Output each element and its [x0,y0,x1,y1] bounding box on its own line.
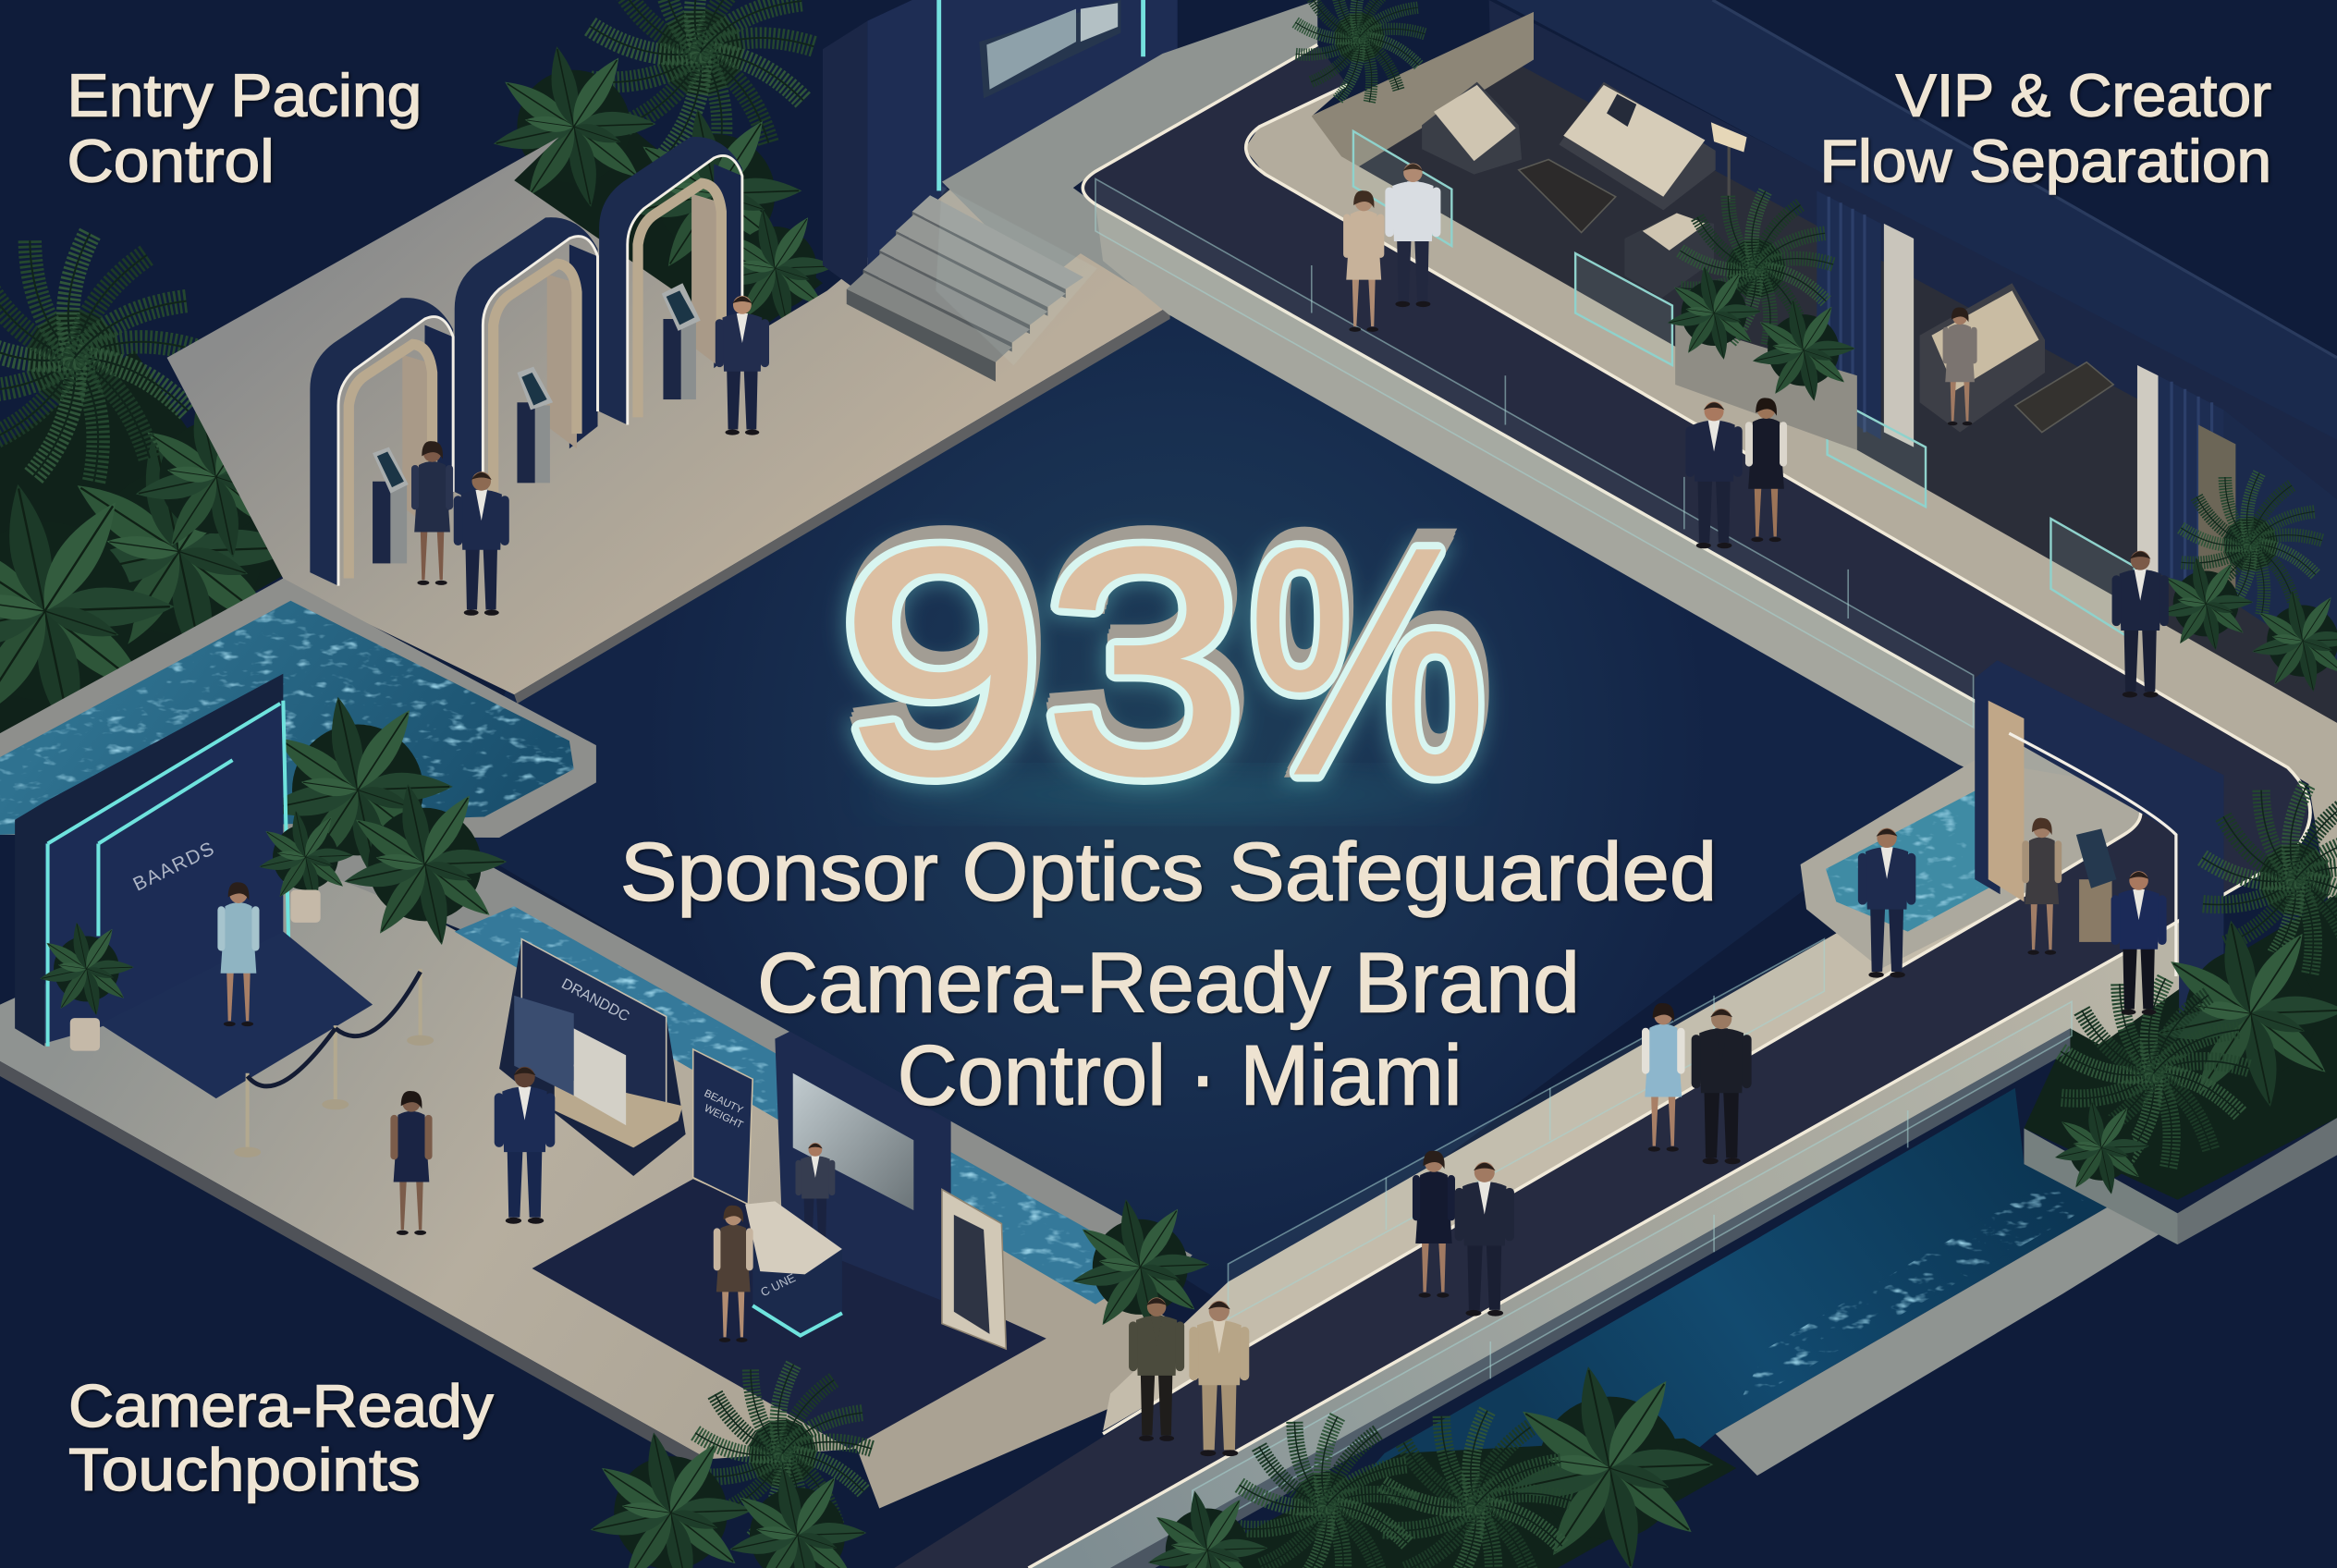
kiosk 3 [662,283,701,399]
plants behind brand wall [262,694,507,947]
screen [979,0,1120,98]
reception counter [745,1201,842,1336]
arch 2 [455,217,598,506]
entry plaza floor [167,137,1170,694]
label: VIP and creator flow [1820,63,2271,195]
walkway light lines [1028,44,2310,1568]
label: entry pacing: Entry Pacing [67,63,422,129]
plants: bottom centre [588,1363,872,1568]
bridge upper concrete [1103,864,2025,1431]
booth [532,1032,1046,1449]
figure face: % [1249,483,1486,840]
headline figure 93% [839,470,1490,840]
plants: lower right [2054,783,2337,1195]
water channel [1312,1088,2125,1536]
kiosk 2 [517,367,553,483]
plants: left garden [0,232,300,741]
headline line 1: Sponsor Optics Safeguarded [620,827,1717,918]
figure outline: % [1249,483,1486,840]
left garden bed [0,350,287,738]
glow: 9 [839,483,1043,840]
extrusion: 9 [843,473,1046,831]
second lounge sofa [1920,283,2045,433]
lower concourse floor [0,857,1178,1509]
floor lamp [1711,122,1747,202]
plant at booth corner [1071,1197,1209,1337]
figure face: 9 [839,483,1043,840]
curtains [1817,190,1914,447]
concrete lounge wall [1310,12,1534,182]
bridge underside [1110,1028,2070,1568]
kiosk 1 [373,447,409,563]
second curtains [2137,365,2223,596]
booth screen [793,1073,913,1210]
stanchions [234,969,434,1158]
zone: lounge [1310,12,2337,670]
label: camera-ready touchpoints: Touchpoints [68,1437,421,1503]
water strip [321,805,1193,1305]
guest at counter [714,1206,753,1342]
merch stand: DRANDDC [558,975,632,1025]
stair wall with screen [823,0,1178,298]
headline line 3: Control · Miami [898,1029,1462,1123]
planter with plants [1666,190,1857,450]
brand platform [100,932,373,1098]
portrait banner [942,1190,1006,1349]
label: entry pacing [67,63,422,195]
arch 3 [599,137,742,424]
extrusion: 9 [841,478,1044,836]
right planter [2024,894,2337,1244]
floor guests [390,1067,555,1235]
coffee table [1519,160,1616,232]
walkway concrete upper strip [1244,85,2337,954]
headline line 2: Camera-Ready Brand [757,937,1580,1031]
banner [693,1049,752,1205]
zone: upper right wall bands [1312,0,2337,730]
plants: top plant bed [491,0,836,340]
banner: WEIGHT [703,1103,745,1132]
central navy panel [447,305,1989,1312]
label: VIP and creator flow: Flow Separation [1820,129,2271,195]
label: entry pacing: Control [67,129,275,195]
plaza edge [514,305,1170,704]
glow: 3 [1044,483,1244,840]
walkway guests [1129,163,2169,1456]
floor edge [0,1061,708,1474]
booth carpet [532,1179,1046,1449]
glow [839,483,1486,840]
arch 1 [310,298,453,586]
plants: bottom band [1146,1364,1736,1568]
lounge glass panels [1353,131,2135,641]
merch stand [499,939,686,1176]
extrusion: 9 [844,470,1047,827]
potted plant left [39,921,134,1051]
second armchair [1624,214,1714,298]
booth wall [775,1032,951,1305]
channel coping [1716,1197,2176,1476]
small pool [1801,760,2154,969]
bridge lower concrete [1028,921,2181,1568]
end wall [2223,410,2337,670]
extrusion: % [1252,473,1489,831]
figure face [839,483,1486,840]
potted plant right [258,809,353,923]
glow: % [1249,483,1486,840]
plant at lounge entry [1294,0,1425,103]
left pool [0,579,596,838]
plants: right of lounge [2158,472,2337,693]
staff behind counter [795,1143,835,1245]
extrusion: 3 [1046,473,1247,831]
extrusion: % [1254,470,1490,827]
glass rails [1095,178,2072,1536]
banner: BEAUTY [703,1088,745,1117]
arch kiosk [2076,828,2116,942]
brand wall [15,674,297,1047]
floor glow under figure [864,784,1475,805]
label: camera-ready touchpoints [68,1373,494,1503]
side table [2015,362,2113,433]
extrusion: 3 [1045,478,1246,836]
figure outline [839,483,1486,840]
figure face: 3 [1044,483,1244,840]
right arch [1975,660,2223,1013]
seated guest [1943,307,1977,425]
label: VIP and creator flow: VIP & Creator [1896,63,2271,129]
stairs [847,195,1083,382]
reception counter: C UNE [758,1270,798,1299]
presenter on platform [217,882,260,1026]
walkway carpet [894,44,2310,1568]
arches [310,137,742,586]
extrusion: 3 [1047,470,1249,827]
extrusion [841,470,1490,836]
lounge armchair [1422,82,1522,175]
glass stair rail [936,187,1097,365]
deck lower concrete [1095,204,2116,781]
staff at entry gates [411,296,769,616]
label: camera-ready touchpoints: Camera-Ready [68,1373,494,1439]
extrusion: % [1251,478,1487,836]
concrete landing [942,0,1317,309]
wall brand text: BAARDS [129,838,219,896]
figure outline: 3 [1044,483,1244,840]
figure outline: 9 [839,483,1043,840]
lounge sofa [1559,82,1716,210]
